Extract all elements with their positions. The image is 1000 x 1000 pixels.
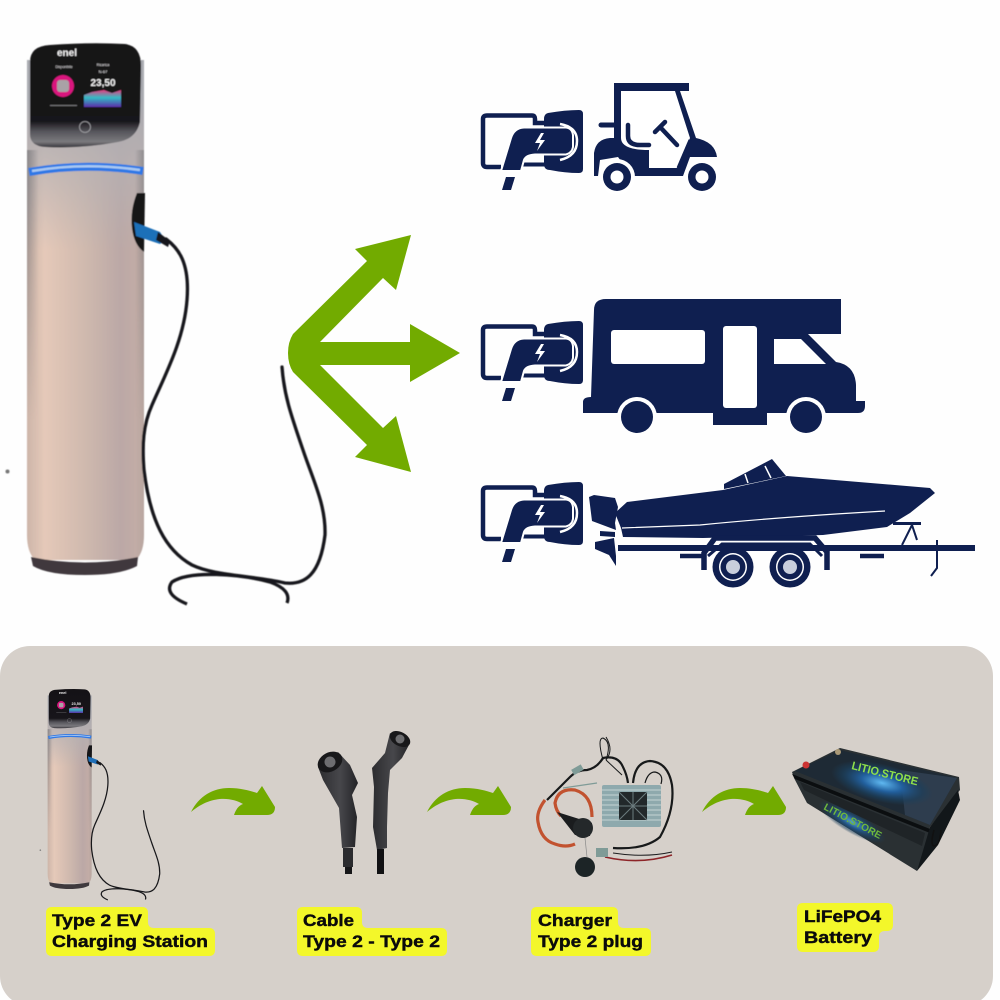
label: Type 2 EV Charging Station: Charging Station bbox=[52, 933, 208, 951]
label: Type 2 EV Charging Station: Type 2 EV bbox=[52, 912, 142, 930]
step 3: charger bbox=[531, 737, 672, 956]
photo: type 2 cable bbox=[314, 728, 413, 874]
icon: motorhome bbox=[583, 299, 865, 437]
station screen text: Ricarica bbox=[97, 63, 109, 67]
step 2: cable bbox=[297, 728, 447, 956]
icon: plug for cart bbox=[483, 110, 583, 190]
label: Cable Type 2 - Type 2: Type 2 - Type 2 bbox=[303, 933, 440, 951]
step 4: battery bbox=[792, 748, 960, 952]
icon: boat on trailer bbox=[589, 459, 975, 588]
photo: charger with cables bbox=[538, 737, 672, 877]
arrow 2 bbox=[427, 786, 511, 815]
label: Cable Type 2 - Type 2: Cable bbox=[303, 912, 354, 930]
battery side brand text: LITIO.STORE bbox=[822, 802, 884, 842]
branching arrows bbox=[288, 235, 460, 472]
station screen text: 23,50 bbox=[90, 78, 116, 89]
charging station photo bbox=[6, 43, 325, 604]
station screen text: enel bbox=[57, 48, 77, 59]
label: Type 2 EV Charging Station bbox=[46, 907, 215, 956]
icon: plug for boat bbox=[483, 482, 583, 562]
label: Charger Type 2 plug: Charger bbox=[538, 912, 613, 930]
arrow 3 bbox=[702, 786, 786, 815]
boat on trailer with charge plug bbox=[483, 459, 975, 588]
label: LiFePO4 Battery: Battery bbox=[804, 929, 873, 947]
motorhome with charge plug bbox=[483, 299, 865, 437]
arrow 1 bbox=[191, 786, 275, 815]
station screen text bbox=[55, 48, 116, 89]
panel: charging chain bbox=[0, 646, 993, 1000]
label: Charger Type 2 plug: Type 2 plug bbox=[538, 933, 643, 951]
battery brand text: LITIO.STORE bbox=[850, 760, 919, 788]
photo: mini charging station: 23,50 bbox=[72, 702, 81, 706]
label: LiFePO4 Battery bbox=[797, 903, 893, 952]
photo: LiFePO4 battery bbox=[792, 748, 960, 871]
icon: plug for motorhome bbox=[483, 321, 583, 401]
icon: golf cart bbox=[594, 83, 720, 195]
station screen text: Disponibile bbox=[55, 65, 73, 69]
label: Cable Type 2 - Type 2 bbox=[297, 907, 447, 956]
step 1: charging station bbox=[40, 689, 215, 956]
station screen text: N-67 bbox=[99, 69, 108, 74]
label: LiFePO4 Battery: LiFePO4 bbox=[804, 908, 882, 926]
photo: mini charging station: enel bbox=[59, 691, 66, 695]
photo: mini charging station bbox=[40, 689, 160, 900]
label: Charger Type 2 plug bbox=[531, 907, 651, 956]
golf cart with charge plug bbox=[483, 83, 720, 195]
